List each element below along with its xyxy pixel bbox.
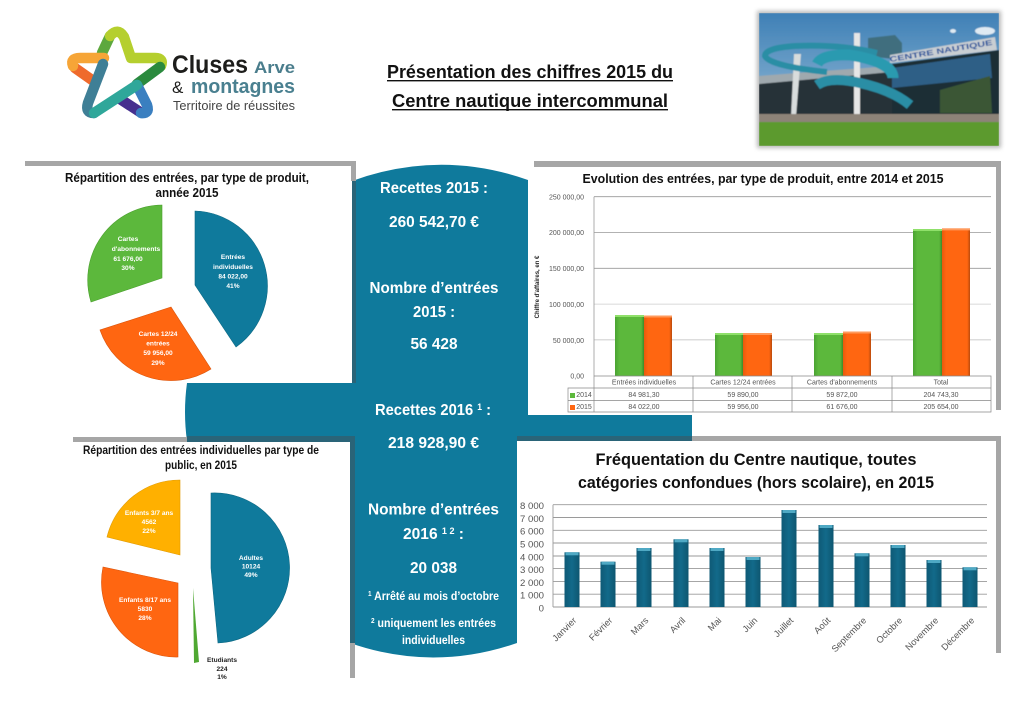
pie slice: Entrées individuelles: 41% (226, 283, 240, 290)
pie slice: Etudiants (193, 588, 237, 681)
pie slice: Enfants 8/17 ans: Enfants 8/17 ans (119, 597, 171, 604)
y axis labels: 3 000 (520, 565, 544, 576)
data table: 205 654,00 (923, 404, 959, 411)
y axis labels: 8 000 (520, 501, 544, 512)
pie slice: Enfants 3/7 ans: 22% (142, 528, 156, 535)
heading: public, en 2015 (165, 458, 237, 472)
y axis labels (549, 194, 584, 380)
y axis labels: 7 000 (520, 514, 544, 525)
pie slice: Cartes d'abonnements: 61 676,00 (113, 256, 143, 263)
month labels: Février (587, 615, 614, 643)
bars 2015 (644, 228, 970, 376)
month labels: Octobre (874, 615, 904, 646)
month labels: Mai (706, 615, 723, 633)
y axis labels: 150 000,00 (549, 266, 584, 273)
bar top highlights (615, 228, 970, 335)
pie slice: Enfants 3/7 ans (107, 480, 180, 555)
pie slice: Entrées individuelles: individuelles (213, 264, 253, 271)
data table: Total (934, 380, 949, 386)
key figures text in central panel: : (454, 526, 464, 543)
pie slice: Cartes 12/24 entrées: Cartes 12/24 (139, 331, 178, 338)
central teal cross panel (185, 165, 692, 658)
panel: monthly attendance bar chart (517, 436, 1001, 654)
pie slice: Cartes d'abonnements: Cartes (118, 236, 139, 243)
photo: centre nautique building with water slide: CENTRE NAUTIQUE (889, 38, 993, 64)
data table: Cartes 12/24 entrées (710, 380, 776, 386)
heading: Répartition des entrées individuelles par type de (83, 443, 319, 457)
logo: Cluses Arve & montagnes: Territoire de réussites (173, 98, 295, 113)
data table: 61 676,00 (826, 404, 858, 411)
gridlines (553, 505, 987, 607)
pie slice: Cartes d'abonnements: d'abonnements (112, 246, 161, 253)
month labels (550, 615, 976, 654)
pie slice: Cartes d'abonnements (88, 205, 162, 302)
y axis labels: 0,00 (570, 374, 584, 380)
pie slice: Cartes 12/24 entrées: 29% (151, 360, 165, 367)
key figures text in central panel: 2 (371, 618, 375, 625)
pie slice: Cartes 12/24 entrées: entrées (146, 340, 170, 348)
pie slice: Adultes: Adultes (239, 555, 263, 562)
key figures text in central panel: 2015 : (413, 304, 455, 321)
bars 2014 (615, 229, 942, 376)
y axis labels: 4 000 (520, 552, 544, 564)
pie slice: Etudiants: 224 (216, 666, 228, 673)
y axis labels: 0 (539, 604, 544, 614)
data table: 59 890,00 (727, 392, 759, 399)
heading: année 2015 (156, 186, 219, 200)
pie slice: Etudiants: Etudiants (207, 657, 237, 664)
y axis labels: 100 000,00 (549, 302, 584, 309)
y axis labels: 200 000,00 (549, 230, 584, 237)
bars by month (564, 510, 978, 607)
main title (387, 61, 673, 111)
key figures text in central panel: : (482, 402, 491, 419)
main title: Présentation des chiffres 2015 du (387, 61, 673, 82)
main title: Centre nautique intercommunal (392, 90, 668, 111)
month labels: Novembre (903, 615, 940, 652)
key figures text in central panel: 2016 (403, 526, 437, 543)
panel: evolution bar chart 2014 vs 2015 (528, 161, 1001, 415)
key figures text in central panel: 260 542,70 € (389, 214, 479, 231)
logo: Cluses Arve & montagnes: & (172, 78, 184, 97)
pie slice: Adultes (211, 493, 290, 643)
logo: Cluses Arve & montagnes (72, 32, 295, 113)
logo: Cluses Arve & montagnes: montagnes (191, 76, 295, 98)
month labels: Janvier (550, 615, 578, 643)
key figures text in central panel: Recettes 2016 (375, 402, 478, 419)
key figures text in central panel: individuelles (402, 635, 465, 647)
data table (568, 376, 991, 412)
y axis labels: 6 000 (520, 526, 544, 538)
key figures text in central panel: 218 928,90 € (388, 435, 479, 452)
key figures text in central panel: 1 (477, 402, 482, 412)
month labels: Décembre (939, 615, 976, 652)
data table: 2015 (576, 404, 592, 411)
pie slice: Cartes d'abonnements: 30% (121, 265, 135, 272)
data table: 59 872,00 (826, 392, 858, 399)
month labels: Juillet (772, 615, 796, 639)
key figures text in central panel: Nombre d’entrées (370, 280, 498, 297)
key figures text in central panel (368, 180, 499, 647)
pie slice: Enfants 3/7 ans: Enfants 3/7 ans (125, 510, 174, 517)
pie slice: Cartes 12/24 entrées (100, 307, 211, 381)
pie slice: Enfants 8/17 ans: 5830 (138, 606, 153, 613)
bar caps (566, 510, 976, 570)
y axis labels: 1 000 (520, 590, 544, 602)
y axis labels (520, 501, 544, 614)
key figures text in central panel: 56 428 (410, 336, 458, 353)
heading: Evolution des entrées, par type de produit, entre 2014 et 2015 (582, 171, 944, 186)
logo: Cluses Arve & montagnes: Arve (254, 58, 295, 77)
pie slice: Enfants 8/17 ans (101, 567, 178, 657)
month labels: Mars (629, 615, 651, 637)
panel: product breakdown pie 2015 (25, 161, 356, 383)
y axis labels: 50 000,00 (553, 338, 584, 345)
logo: Cluses Arve & montagnes: Cluses (172, 51, 248, 79)
heading (83, 443, 319, 472)
data table: 59 956,00 (727, 404, 759, 411)
pie slice: Entrées individuelles: Entrées (221, 254, 245, 261)
heading: catégories confondues (hors scolaire), en 2015 (578, 473, 934, 492)
pie slice: Adultes: 49% (244, 572, 258, 579)
month labels: Septembre (830, 615, 868, 654)
key figures text in central panel: uniquement les entrées (375, 618, 496, 630)
y axis title: Chiffre d'affaires, en € (535, 255, 541, 318)
pie slice: Entrées individuelles (195, 211, 267, 347)
pie slice: Entrées individuelles: 84 022,00 (218, 274, 248, 280)
y axis labels: 2 000 (520, 578, 544, 589)
data table: 84 981,30 (628, 392, 660, 399)
month labels: Juin (740, 615, 759, 634)
pie slice: Cartes 12/24 entrées: 59 956,00 (143, 350, 173, 357)
data table: 204 743,30 (923, 392, 959, 399)
y axis labels: 5 000 (520, 540, 544, 550)
heading: Fréquentation du Centre nautique, toutes (596, 450, 916, 469)
panel: individual entries by public pie (73, 436, 355, 681)
key figures text in central panel: Arrêté au mois d’octobre (372, 591, 499, 603)
data table: 2014 (576, 392, 592, 399)
heading (65, 171, 309, 200)
data table: Entrées individuelles (612, 380, 677, 386)
heading (578, 450, 934, 492)
key figures text in central panel: 1 2 (442, 526, 454, 536)
data table: 84 022,00 (628, 404, 660, 411)
key figures text in central panel: Recettes 2015 : (380, 180, 488, 197)
key figures text in central panel: 20 038 (410, 560, 457, 577)
icon: ribbon star (72, 32, 162, 113)
photo: centre nautique building with water slide (757, 11, 1001, 148)
pie slice: Enfants 8/17 ans: 28% (138, 615, 152, 622)
data table: Cartes d'abonnements (807, 380, 878, 386)
heading: Répartition des entrées, par type de produit, (65, 171, 309, 185)
pie slice: Etudiants: 1% (217, 674, 227, 681)
y axis labels: 250 000,00 (549, 194, 584, 202)
key figures text in central panel: 1 (368, 591, 372, 598)
pie slice: Enfants 3/7 ans: 4562 (142, 519, 157, 526)
gridlines (594, 197, 991, 376)
month labels: Août (812, 615, 833, 636)
key figures text in central panel: Nombre d’entrées (368, 502, 499, 518)
month labels: Avril (668, 615, 687, 635)
pie slice: Adultes: 10124 (242, 564, 260, 570)
